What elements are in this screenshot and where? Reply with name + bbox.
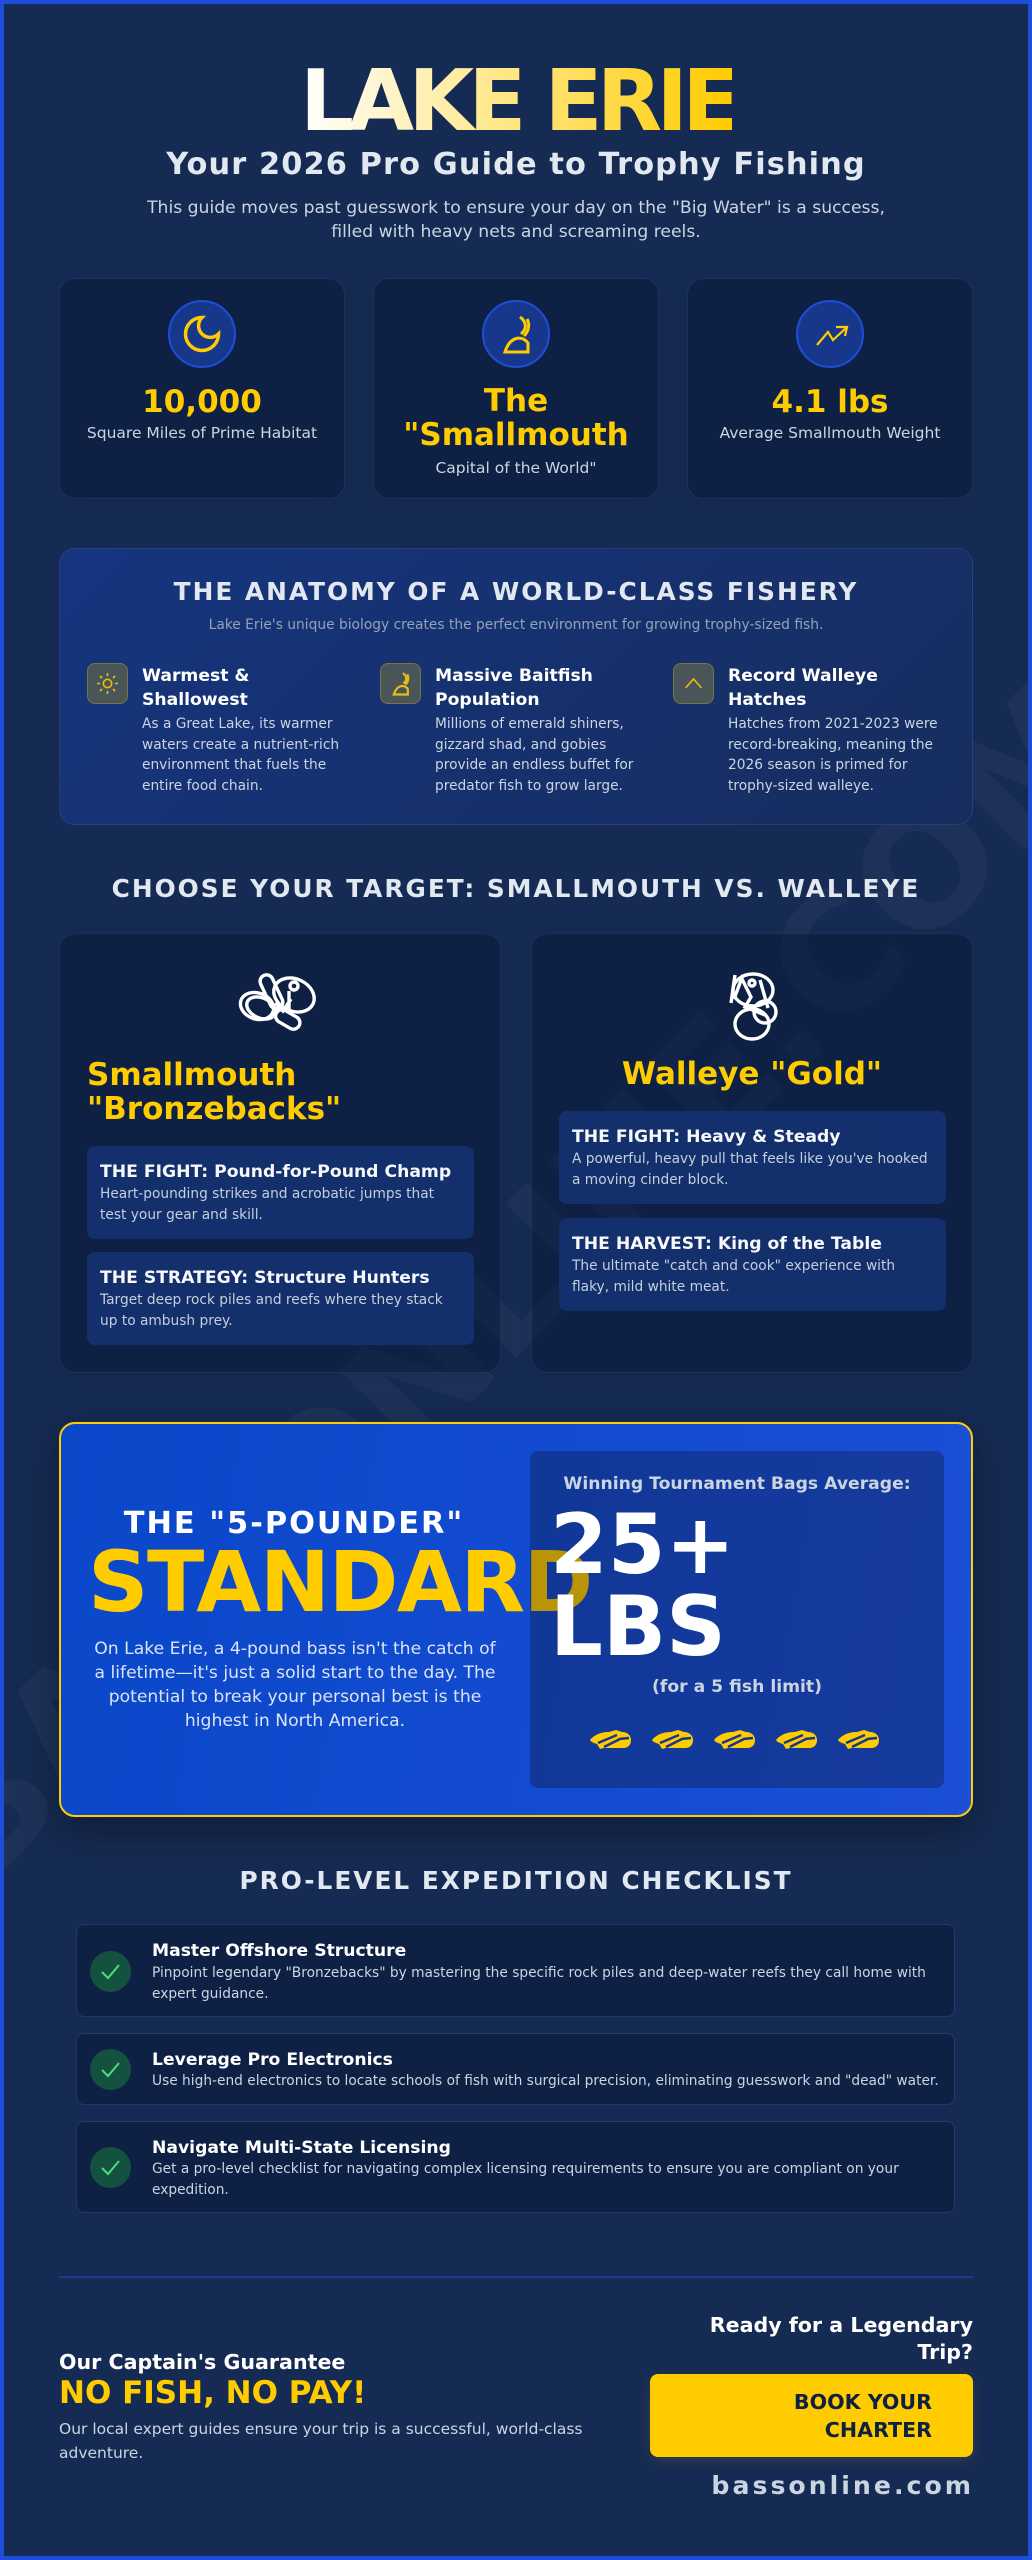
panel: smallmouth [59,933,501,1373]
feature: warmest [87,663,339,794]
item title: Master Offshore Structure [152,1941,406,1961]
fact text: Target deep rock piles and reefs where they stack [100,1292,443,1308]
feature title: Massive Baitfish [435,666,593,686]
icon row: five fish [590,1730,879,1749]
icon: moon [168,300,236,368]
item text: expert guidance. [152,1986,268,2002]
intro text [147,198,885,242]
subtitle: Your 2026 Pro Guide to Trophy Fishing [166,147,866,182]
fact text: flaky, mild white meat. [572,1278,730,1294]
intro text: filled with heavy nets and screaming reels. [331,222,701,242]
icon: check [90,2147,131,2188]
fact: the fight [559,1111,946,1204]
fact text: A powerful, heavy pull that feels like you've hooked [572,1151,928,1167]
feature text: gizzard shad, and gobies [435,737,606,753]
feature text: Hatches from 2021-2023 were [728,716,938,732]
headline: STANDARD [88,1533,592,1631]
stat number: "Smallmouth [403,417,629,453]
stat label: Winning Tournament Bags Average: [563,1474,911,1494]
feature text: 2026 season is primed for [728,757,908,773]
stat card: capital [373,278,659,499]
feature text [142,716,339,794]
feature title [142,666,249,710]
cta text: Ready for a Legendary [710,2313,973,2337]
feature: baitfish [380,663,634,794]
feature text: Millions of emerald shiners, [435,716,624,732]
feature title [435,666,593,710]
stat number: 10,000 [142,384,262,420]
section heading: choose your target: CHOOSE YOUR TARGET: SMALLMOUTH VS. WALLEYE [112,874,920,903]
fact heading: THE FIGHT: Heavy & Steady [572,1127,840,1147]
panel: anatomy of a fishery [59,548,973,825]
stat value: 25+ [550,1496,735,1593]
stat card: habitat [59,278,345,499]
guarantee text: adventure. [59,2444,143,2462]
icon: sun [87,663,128,704]
icon: fish hook [482,300,550,368]
fact text [100,1292,443,1328]
item text: Get a pro-level checklist for navigating complex licensing requirements to ensure you are compliant on your [152,2161,899,2177]
footer: call to action [648,2313,975,2500]
stat number: 4.1 lbs [772,384,888,420]
stat number: The [484,383,548,419]
stat label: Capital of the World" [435,459,597,477]
feature title: Shallowest [142,690,248,710]
item text: Pinpoint legendary "Bronzebacks" by mastering the specific rock piles and deep-water reefs they call home with [152,1965,926,1981]
checklist item: electronics [76,2033,955,2105]
feature text: trophy-sized walleye. [728,778,874,794]
feature text: waters create a nutrient-rich [142,737,339,753]
stat panel [530,1451,944,1788]
stat value: LBS [550,1578,726,1675]
fact text [100,1186,434,1222]
icon: chevron up [673,663,714,704]
cta text [710,2313,973,2364]
panel: walleye [531,933,973,1373]
button label [794,2390,932,2442]
item text [152,2161,899,2198]
fact heading: THE STRATEGY: Structure Hunters [100,1268,430,1288]
fact text: The ultimate "catch and cook" experience with [572,1258,895,1274]
stat label: Average Smallmouth Weight [720,424,940,442]
body text [94,1639,496,1731]
icon: smallmouth fish [238,973,316,1031]
icon: walleye fish [729,972,778,1041]
guarantee text [59,2420,583,2462]
panel: 5-pounder standard [59,1422,973,1817]
stat value [550,1496,735,1675]
fact text: Heart-pounding strikes and acrobatic jumps that [100,1186,434,1202]
stat note: (for a 5 fish limit) [652,1677,822,1697]
item text: Use high-end electronics to locate schools of fish with surgical precision, eliminating guesswork and "dead" water. [152,2073,939,2089]
item text [152,1965,926,2002]
species title: Smallmouth [87,1057,296,1093]
fact heading: THE FIGHT: Pound-for-Pound Champ [100,1162,451,1182]
button label: BOOK YOUR [794,2390,932,2414]
feature text: provide an endless buffet for [435,757,633,773]
item title: Leverage Pro Electronics [152,2050,393,2070]
section subheading: Lake Erie's unique biology creates the perfect environment for growing trophy-sized fish. [209,617,823,633]
feature: walleye hatches [673,663,938,794]
fact text: test your gear and skill. [100,1206,263,1222]
icon: trend up [796,300,864,368]
fact text [572,1151,928,1188]
section heading: checklist: PRO-LEVEL EXPEDITION CHECKLIST [239,1866,793,1895]
icon: check [90,2049,131,2090]
kicker: THE "5-POUNDER" [124,1506,464,1541]
item text: expedition. [152,2182,229,2198]
feature text: As a Great Lake, its warmer [142,716,332,732]
species title: Walleye "Gold" [622,1056,882,1092]
body text: potential to break your personal best is the [109,1687,481,1707]
button label: CHARTER [825,2418,932,2442]
feature text [435,716,634,794]
stat card: weight [687,278,973,499]
feature text: record-breaking, meaning the [728,737,933,753]
icon: fish hook [380,663,421,704]
icon: check [90,1951,131,1992]
fact text [572,1258,895,1294]
fact: the strategy [87,1252,474,1345]
body text: highest in North America. [185,1711,405,1731]
feature title: Hatches [728,690,807,710]
feature text [728,716,938,794]
feature text: entire food chain. [142,778,263,794]
feature title: Record Walleye [728,666,878,686]
guarantee text: Our local expert guides ensure your trip is a successful, world-class [59,2420,583,2438]
footer: guarantee [59,2350,583,2462]
feature text: predator fish to grow large. [435,778,623,794]
item title: Navigate Multi-State Licensing [152,2138,451,2158]
intro text: This guide moves past guesswork to ensure your day on the "Big Water" is a success, [147,198,885,218]
fact text: a moving cinder block. [572,1172,729,1188]
species title [87,1057,341,1127]
body text: On Lake Erie, a 4-pound bass isn't the catch of [94,1639,496,1659]
feature title: Population [435,690,540,710]
feature title: Warmest & [142,666,249,686]
fact heading: THE HARVEST: King of the Table [572,1234,882,1254]
website: bassonline.com [711,2471,974,2500]
fact text: up to ambush prey. [100,1312,233,1328]
feature text: environment that fuels the [142,757,326,773]
species title: "Bronzebacks" [87,1091,341,1127]
stat number [403,383,629,453]
title: LAKE ERIE [300,52,734,151]
guarantee headline: NO FISH, NO PAY! [59,2375,366,2411]
guarantee kicker: Our Captain's Guarantee [59,2350,345,2374]
button [650,2374,973,2457]
body text: a lifetime—it's just a solid start to the day. The [94,1663,496,1683]
stat label: Square Miles of Prime Habitat [87,424,317,442]
fact: the fight [87,1146,474,1239]
checklist item: licensing [76,2121,955,2213]
cta text: Trip? [917,2340,973,2364]
fact: the harvest [559,1218,946,1311]
checklist item: offshore [76,1924,955,2017]
feature title [728,666,878,710]
section heading: THE ANATOMY OF A WORLD-CLASS FISHERY [174,577,858,606]
